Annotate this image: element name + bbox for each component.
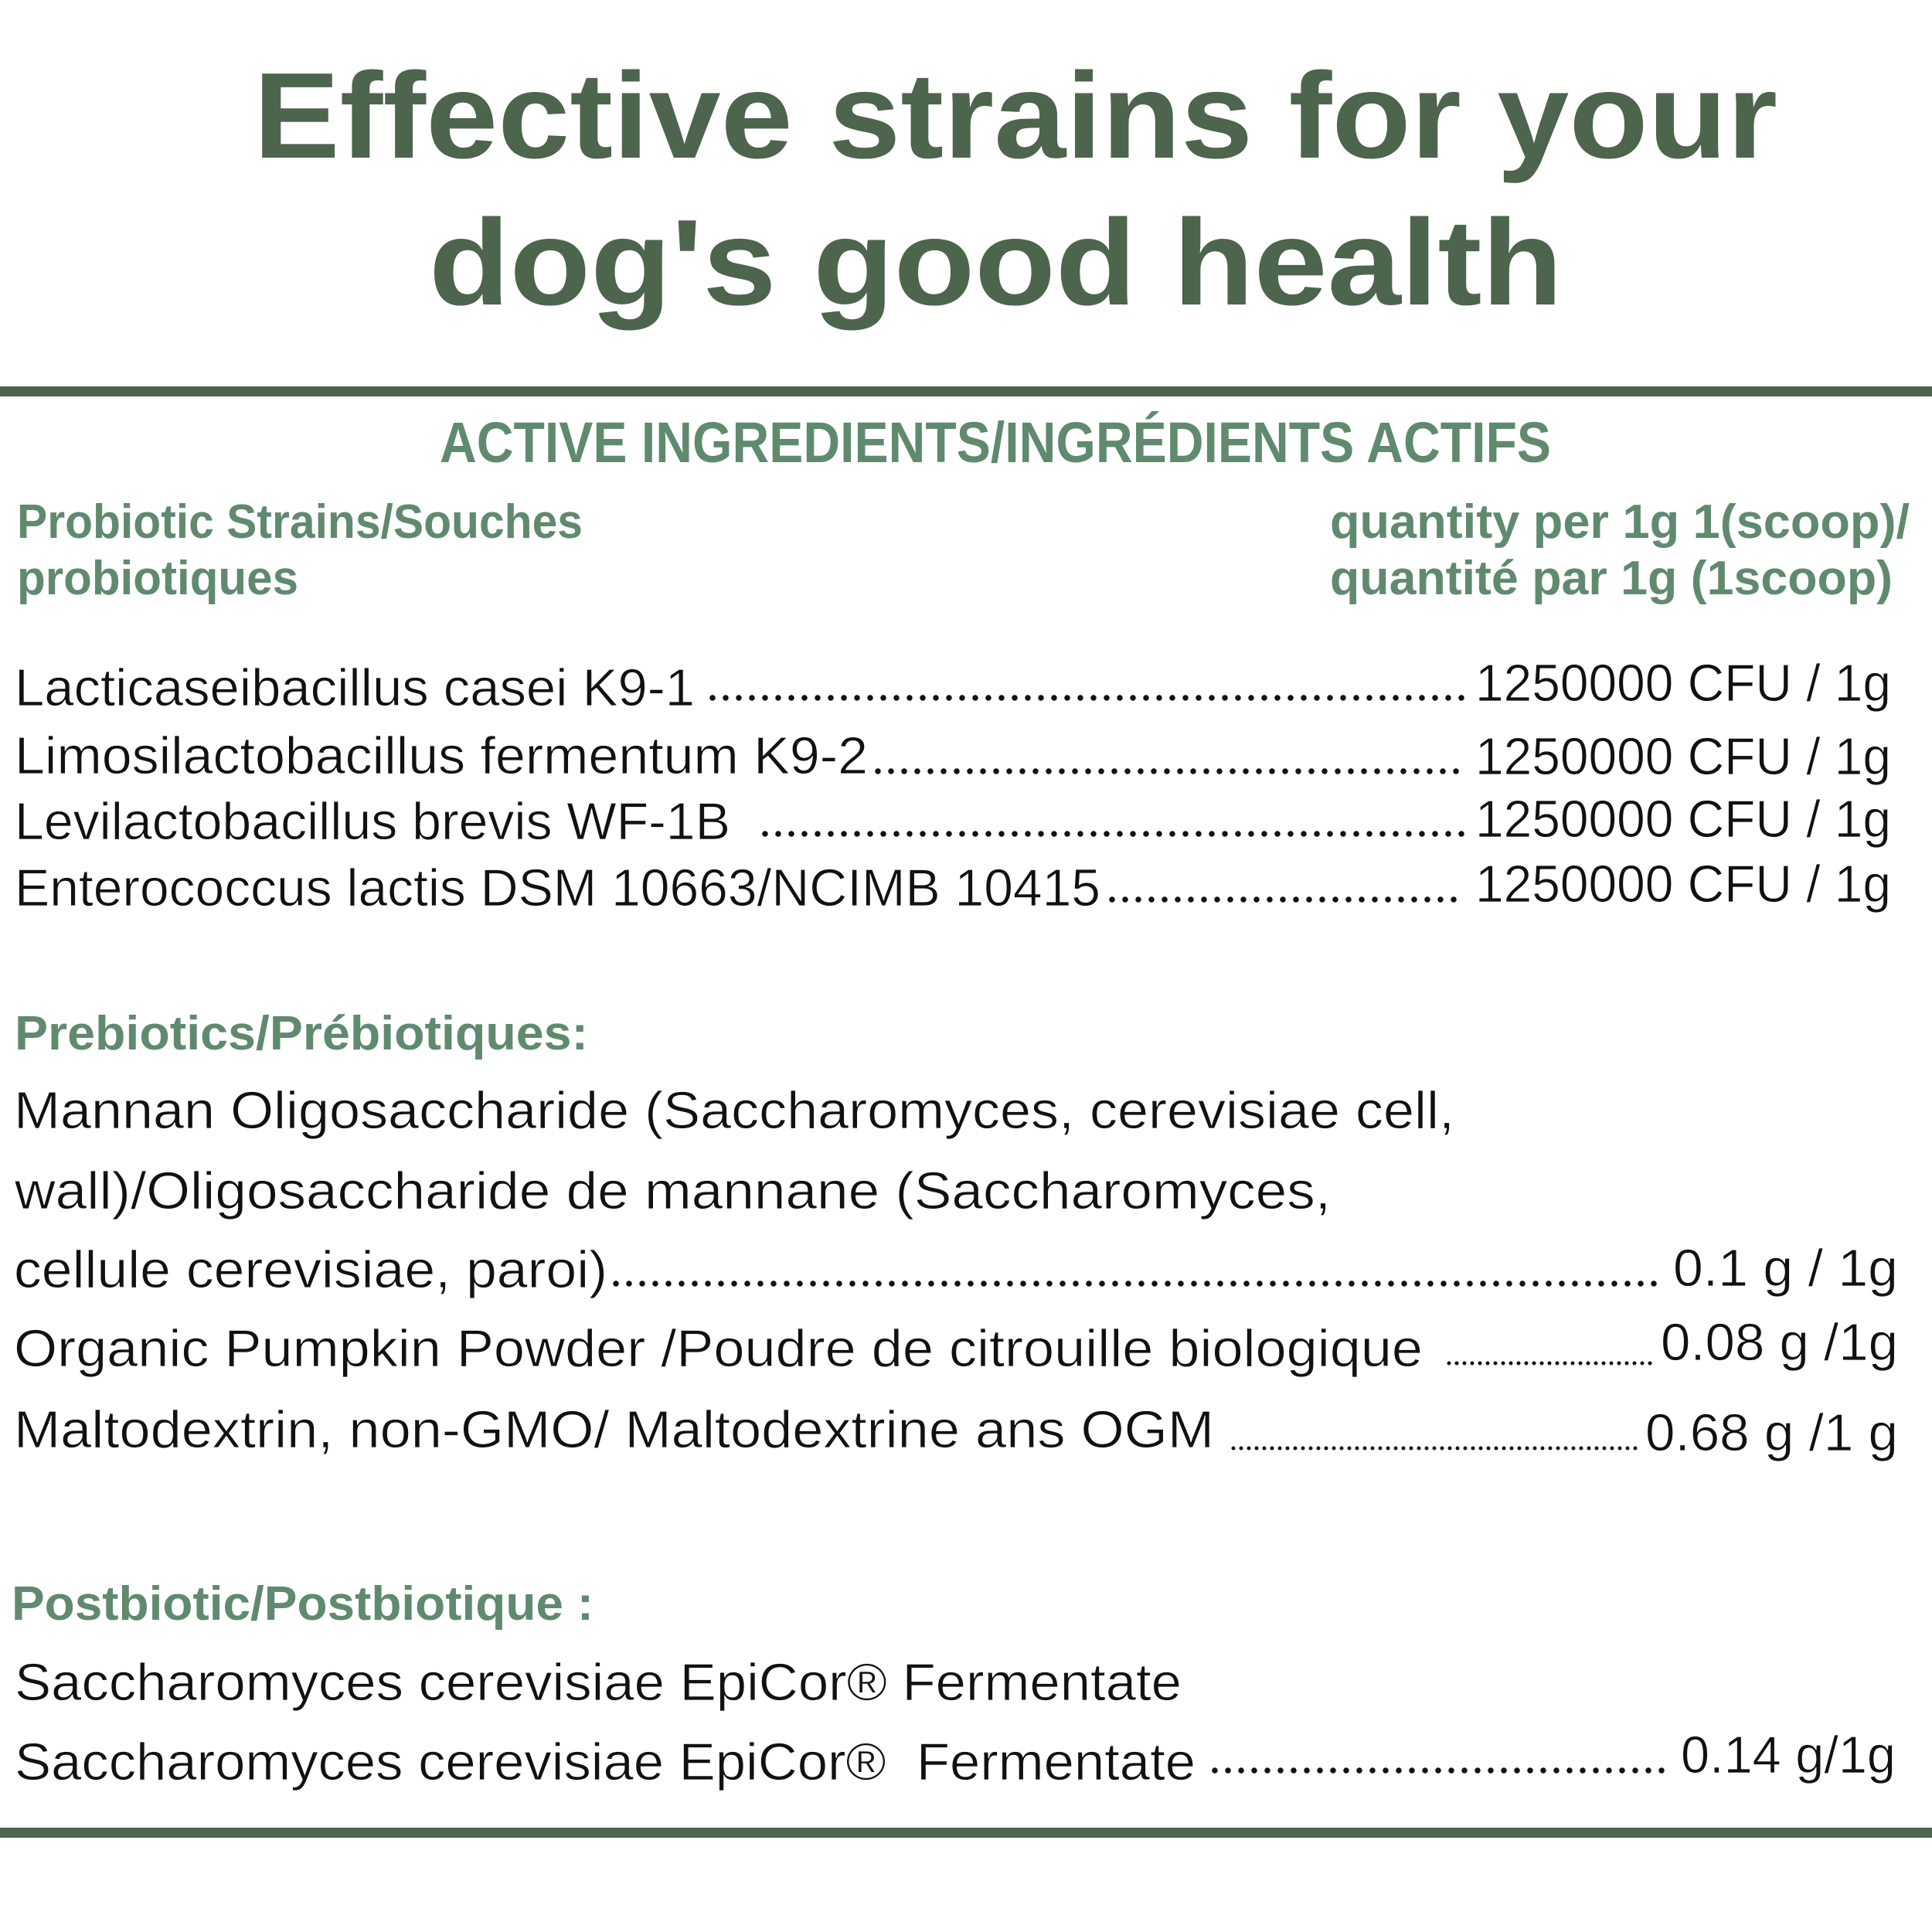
probiotic row 3 <box>15 790 1891 851</box>
prebiotic row: maltodextrin: 0.68 g /1 g <box>1645 1403 1898 1462</box>
bottom divider bar <box>0 1828 1932 1838</box>
heading: prebiotics: Prebiotics/Prébiotiques: <box>15 1007 588 1060</box>
probiotic row 1 <box>15 654 1891 717</box>
postbiotic row 2: Saccharomyces cerevisiae EpiCor® Fermentate <box>15 1733 1196 1791</box>
prebiotic row: mannan oligosaccharide: cellule cerevisiae, paroi) <box>14 1240 607 1299</box>
probiotic row 3: 1250000 CFU / 1g <box>1475 790 1891 849</box>
column heading: quantity: quantity per 1g 1(scoop)/ <box>1330 495 1910 549</box>
probiotic row 4: 1250000 CFU / 1g <box>1475 855 1891 913</box>
prebiotic row: maltodextrin: Maltodextrin, non-GMO/ Maltodextrine ans OGM <box>14 1400 1214 1459</box>
column heading: probiotic strains <box>17 495 583 605</box>
title: dog's good health <box>429 195 1563 331</box>
prebiotic row: maltodextrin <box>14 1400 1898 1462</box>
probiotic row 1: 1250000 CFU / 1g <box>1475 654 1891 713</box>
heading: active ingredients: ACTIVE INGREDIENTS/INGRÉDIENTS ACTIFS <box>440 410 1551 474</box>
heading: postbiotic: Postbiotic/Postbiotique : <box>12 1577 594 1631</box>
probiotic row 2 <box>15 726 1891 786</box>
prebiotic row: mannan oligosaccharide <box>14 1081 1898 1299</box>
prebiotic row: pumpkin powder: Organic Pumpkin Powder /Poudre de citrouille biologique <box>14 1319 1423 1378</box>
prebiotic row: mannan oligosaccharide: wall)/Oligosaccharide de mannane (Saccharomyces, <box>14 1162 1331 1220</box>
column heading: probiotic strains: Probiotic Strains/Souches <box>17 495 583 549</box>
prebiotic row: pumpkin powder <box>14 1313 1898 1378</box>
postbiotic row 2: 0.14 g/1g <box>1681 1726 1896 1784</box>
title: Effective strains for your <box>253 48 1777 184</box>
prebiotic row: mannan oligosaccharide: 0.1 g / 1g <box>1673 1239 1898 1298</box>
column heading: quantity <box>1330 495 1910 605</box>
column heading: probiotic strains: probiotiques <box>17 552 298 605</box>
postbiotic row 2 <box>15 1726 1896 1791</box>
probiotic row 3: Levilactobacillus brevis WF-1B <box>15 792 730 851</box>
column heading: quantity: quantité par 1g (1scoop) <box>1330 552 1893 605</box>
probiotic row 2: Limosilactobacillus fermentum K9-2 <box>15 726 868 785</box>
prebiotic row: mannan oligosaccharide: Mannan Oligosaccharide (Saccharomyces, cerevisiae cell, <box>14 1081 1454 1140</box>
top divider bar <box>0 386 1932 396</box>
postbiotic row 1: Saccharomyces cerevisiae EpiCor® Fermentate <box>15 1653 1182 1712</box>
title <box>253 48 1777 331</box>
probiotic row 2: 1250000 CFU / 1g <box>1475 727 1891 786</box>
prebiotic row: pumpkin powder: 0.08 g /1g <box>1661 1313 1898 1372</box>
probiotic row 4: Enterococcus lactis DSM 10663/NCIMB 10415 <box>15 859 1100 917</box>
probiotic row 1: Lacticaseibacillus casei K9-1 <box>15 658 695 717</box>
probiotic row 4 <box>15 855 1891 917</box>
